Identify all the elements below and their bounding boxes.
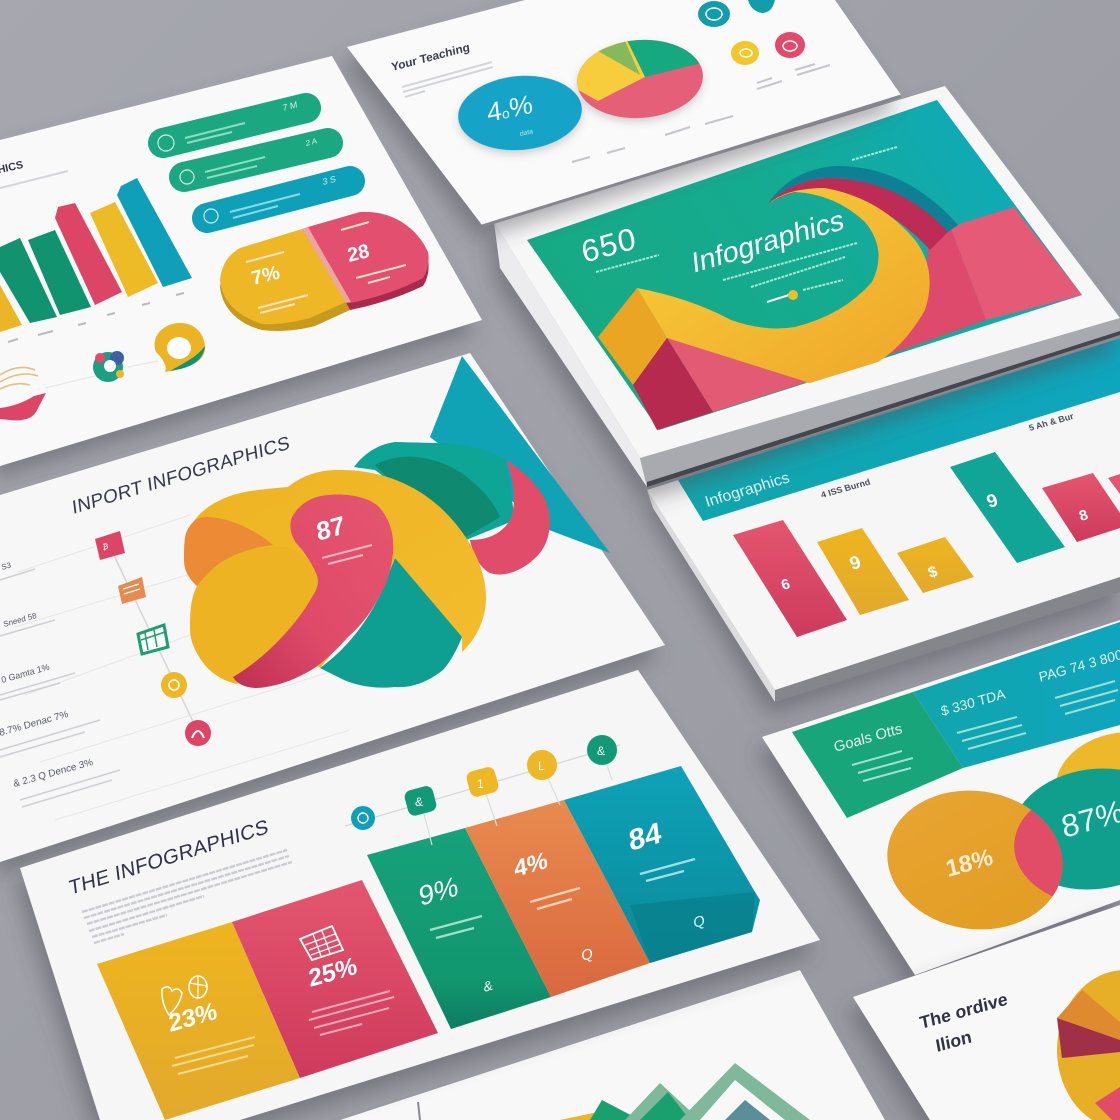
pill: green two [180,136,328,184]
icon: green frame [138,625,168,654]
knot: yellow body [184,470,486,668]
lines [640,859,695,881]
title: Infographics [690,204,845,280]
knot: red ribbon [233,495,393,688]
bar: red: 6 [779,577,792,594]
icon: red circle [185,720,211,746]
step marker: yellow square: 1 [477,777,484,791]
timeline labels: 8.7% Denac 7% [0,709,70,739]
percent: 25% [307,953,359,993]
number: 650 [578,220,640,270]
circle: orange [887,790,1063,930]
pill: teal [204,174,350,223]
percent label: 87 [315,512,347,547]
knot: dark green [375,457,500,537]
panel: bar columns stack [647,338,1120,702]
knot: teal blob [354,442,515,540]
bar: yellow: 9 [847,551,863,574]
step marker: green round: & [597,744,605,758]
lines [430,916,482,938]
knot: teal bottom [320,558,462,688]
bar: clipped red [1108,474,1120,494]
icon: teal swirl [698,1,730,27]
icon: & [483,976,494,995]
pink panel [950,207,1082,320]
percent: 23% [167,998,219,1038]
title: THE INFOGRAPHICS [68,816,270,900]
crimson fold [633,338,713,430]
gold fold [598,288,667,385]
capsule: split callout: 7% [250,261,282,290]
teal circle: 4o% [486,89,534,128]
bar: right red: 8 [1077,508,1090,525]
heading line two: Ilion [934,1026,973,1056]
block: teal [564,766,760,963]
icon: red bird with lines [0,367,46,420]
bar: short yellow: $ [926,563,940,582]
capsule: split callout: 28 [346,240,371,267]
panel: pie fragment card [853,905,1120,1120]
percent: orange circle: 18% [943,844,995,883]
label: right chart heading: 5 Ah & Bur [1028,411,1075,433]
icon: Q [693,913,706,932]
icon: yellow swirl [731,41,759,65]
label: upper chart heading: 4 ISS Burnd [820,477,872,500]
step marker: green [403,785,438,817]
teal corner shape [430,356,610,553]
text lines [402,62,493,97]
step marker: yellow square [465,766,500,798]
block: red [232,880,438,1078]
text lines [572,64,830,162]
panel: pie chart card [347,0,901,226]
header label two: $ 330 TDA [939,685,1007,719]
header text lines [852,681,1118,781]
cover artwork background [527,100,1082,430]
heading lines [0,171,68,188]
subtitle lines [596,147,897,290]
ribbon text lines [322,545,372,564]
header: green block [792,692,963,818]
panel: knot infographic card [0,353,665,862]
step marker: yellow round [527,750,557,780]
chart pin [418,1102,420,1120]
pill: green one: 7 M [282,99,298,113]
timeline labels: 0 Gamta 1% [0,662,50,685]
icon: orange square [118,577,146,604]
knot: pink crescent [470,460,550,574]
block: green [367,828,551,1029]
bar: short yellow [897,537,974,593]
step timeline [345,735,620,845]
icon: red swirl [775,32,805,58]
step marker: teal [351,806,375,830]
header label one: Goals Otts [833,721,904,756]
icon: grid [300,926,343,960]
icon: heart [162,987,182,1015]
step marker: yellow round: L [538,759,545,773]
crescent: crimson [767,178,948,250]
panel: bar chart and pills card [0,56,482,466]
chart: mountain [560,1063,810,1120]
bar: yellow [817,528,909,615]
header: teal block [913,622,1120,768]
knot: yellow lower lobe [190,547,335,684]
step marker: green round [587,735,617,765]
body lines [82,850,292,943]
crescent: dark teal [767,166,958,234]
timeline labels: & 2.3 Q Dence 3% [12,757,94,790]
pink fold [667,338,807,412]
icon: small key [767,290,798,302]
bar: teal [950,452,1065,563]
pill: green one [158,99,306,151]
timeline [15,515,350,820]
icon: flower [93,351,124,382]
connector [45,361,158,388]
icon: red square: ₿ [102,541,109,552]
timeline labels: Sneed 58 [3,611,38,629]
icon: teal badge [748,0,775,13]
bar: right red [1042,473,1120,542]
overlap lens [1014,810,1063,896]
bar: red [733,520,847,637]
header band: Infographics [703,470,792,511]
number: 84 [627,816,663,858]
circle: teal [1022,768,1120,890]
pill: teal: 3 S [322,174,336,187]
icon: yellow circle [161,672,187,698]
mid pink panel [880,227,986,358]
icon: speech bubble [155,323,205,372]
lines [530,888,580,909]
title: INPORT INFOGRAPHICS [71,433,291,519]
icon: globe [189,976,207,998]
bar chart [0,178,192,332]
heading: Your Teaching [390,41,471,74]
chart: pie [1057,970,1120,1120]
lines [172,1037,255,1074]
knot: orange lobe [184,517,273,587]
teal circle: data [519,128,534,138]
panel: blocks infographic card [20,670,820,1120]
bar: teal: 9 [984,489,1000,512]
timeline labels: S3 [1,560,12,572]
axis labels [8,293,184,342]
timeline labels [0,560,120,807]
header band [678,338,1120,521]
step marker: green: & [415,795,423,809]
percent: 4% [513,847,549,883]
panel: cover card stack [494,86,1120,487]
block: orange [465,800,650,997]
heading: The ordive [918,989,1009,1033]
capsule: split callout [220,212,429,331]
icon: red square [95,531,125,560]
lines [309,991,394,1035]
pie chart [574,40,706,126]
block: yellow [97,922,300,1120]
teal circle [455,71,585,155]
percent: 9% [417,870,459,912]
crescent: yellow swoosh [637,188,930,383]
circle: yellow [1056,732,1120,778]
panel: deck card [340,970,885,1120]
pill: green two: 2 A [305,136,318,148]
panel: overlapping circles card [762,620,1120,975]
icon: Q [581,946,594,965]
